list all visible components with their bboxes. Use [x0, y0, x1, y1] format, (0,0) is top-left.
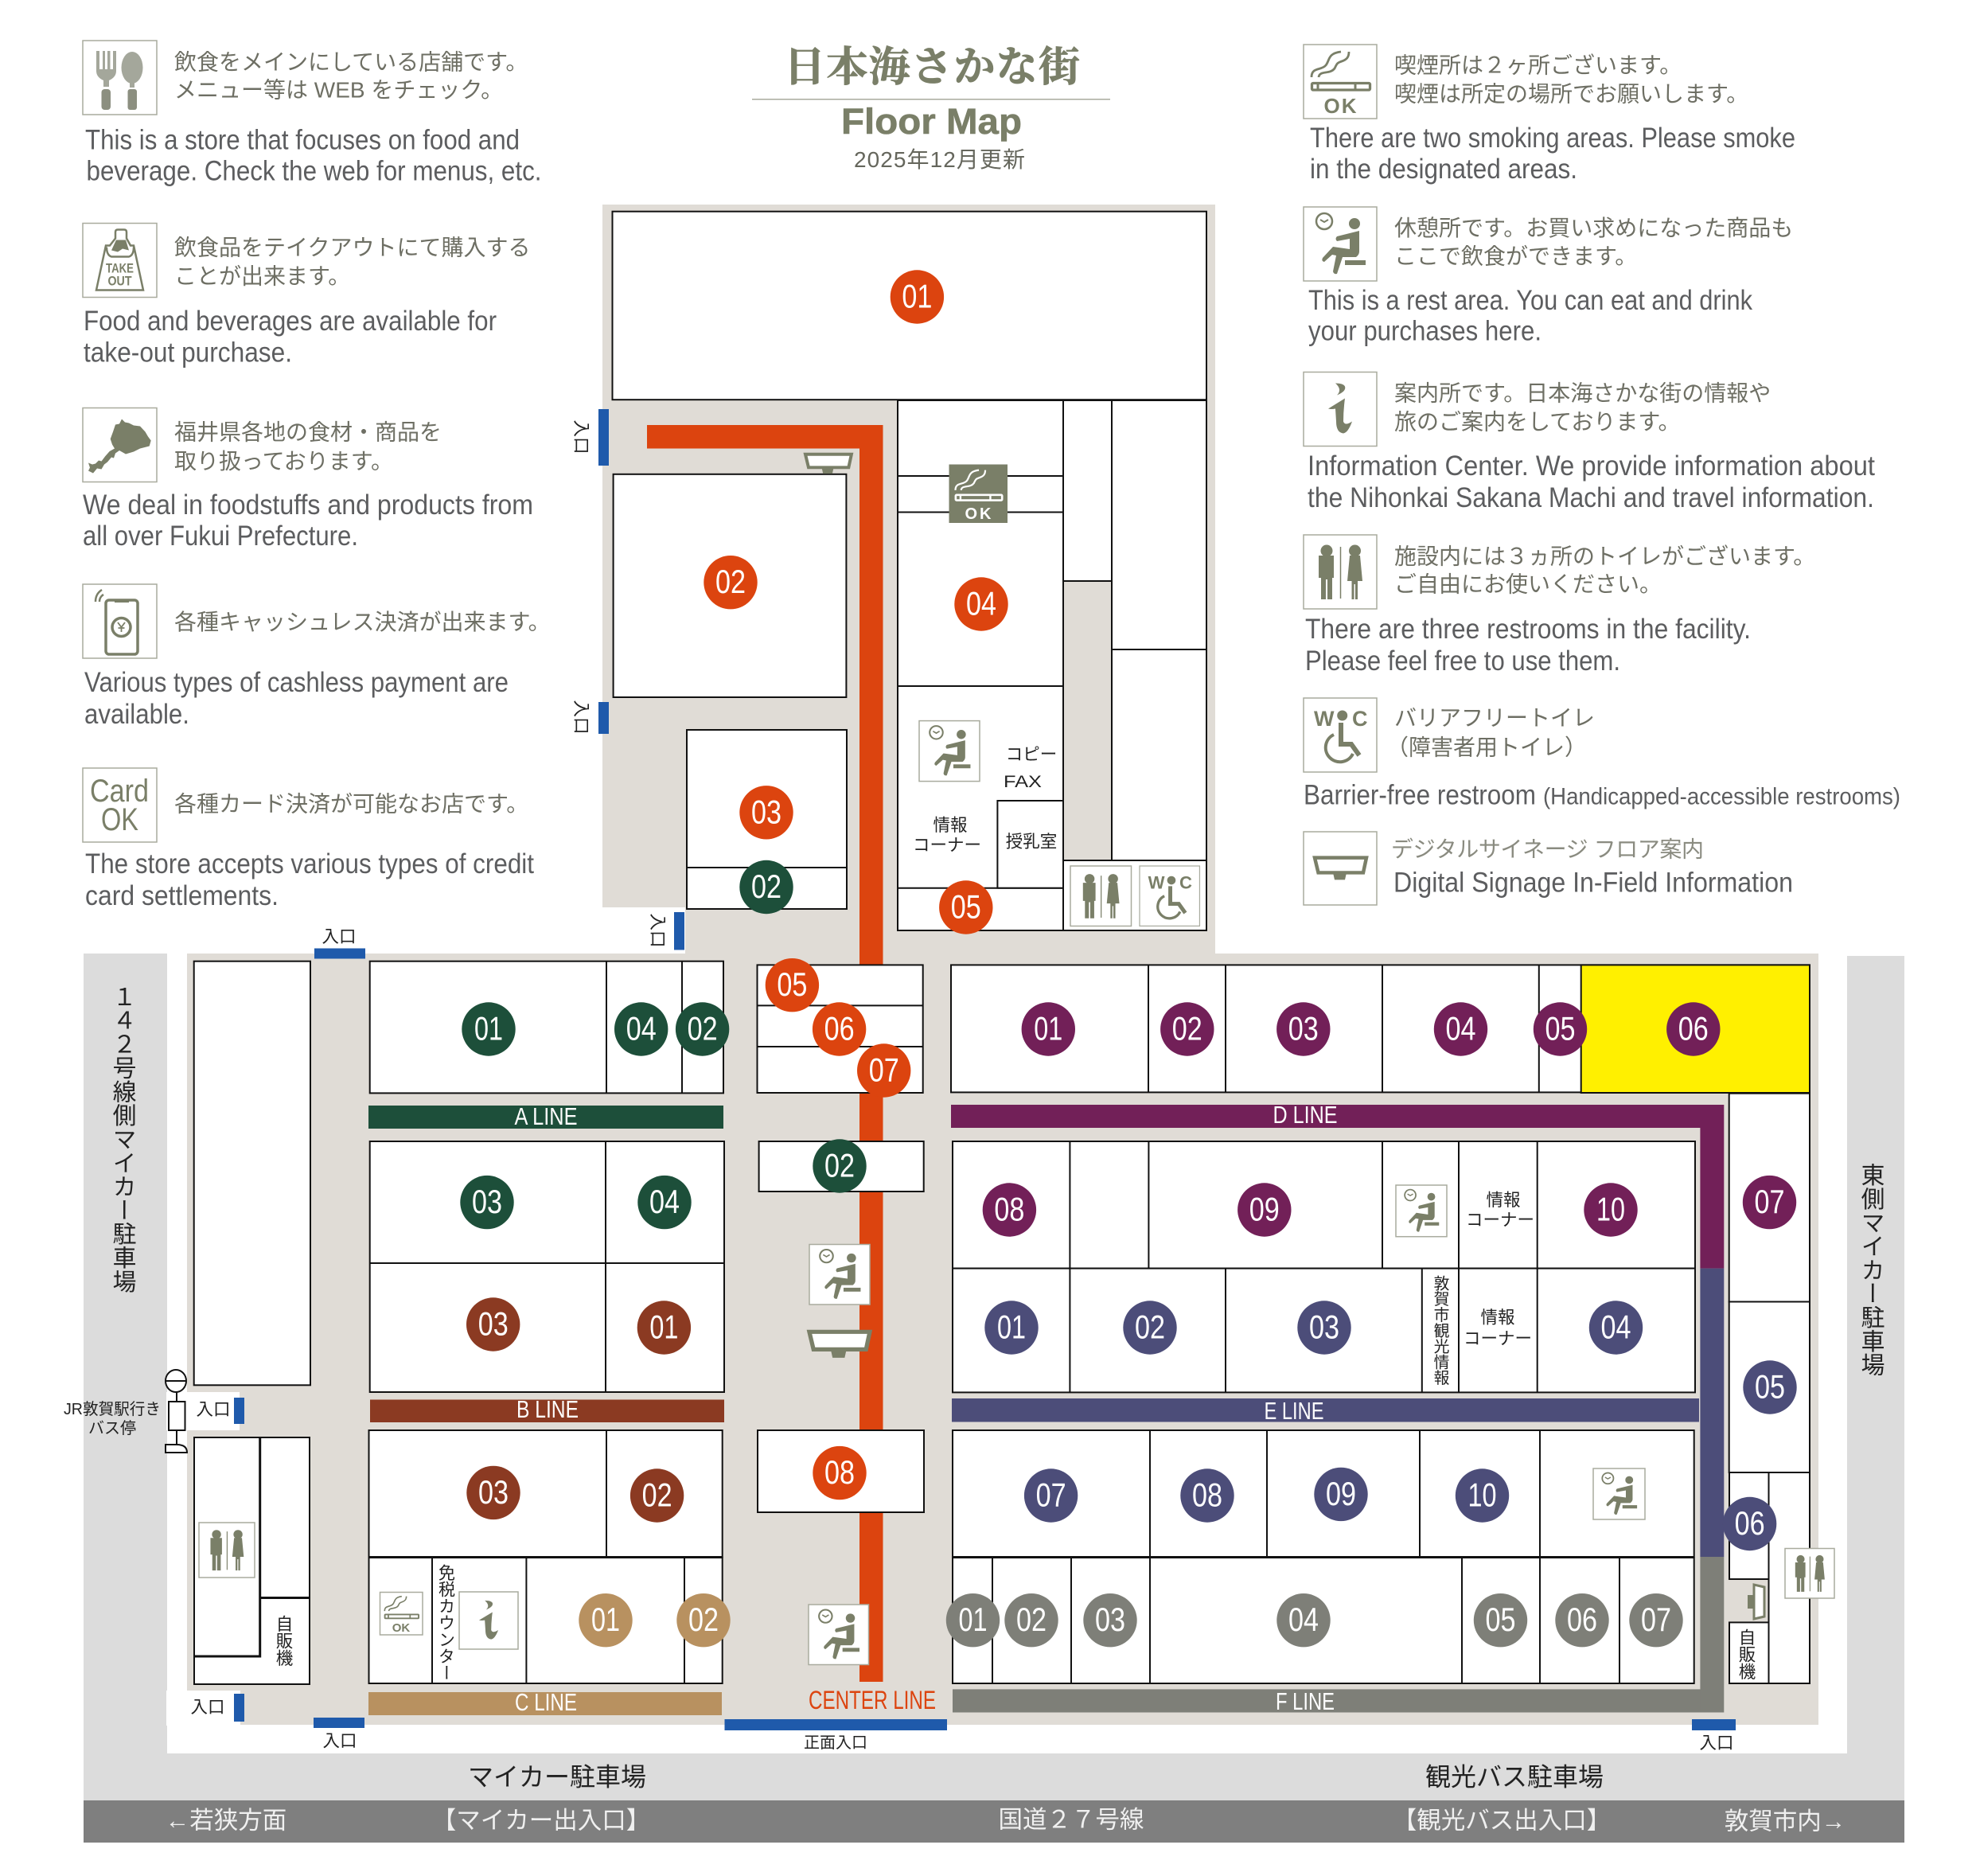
panel: center islands — [758, 965, 924, 1512]
icon: smoking OK — [1304, 45, 1377, 119]
badge: C 02: 02 — [688, 1601, 719, 1638]
panel: C line shop block — [369, 1430, 723, 1683]
badge: center 04: 04 — [966, 584, 996, 622]
badge: E 08: 08 — [1192, 1476, 1222, 1514]
label: vending machine west: 自販機 — [274, 1615, 293, 1667]
badge: E 05 — [1743, 1360, 1797, 1414]
title: Floor Map: Floor Map — [841, 101, 1022, 142]
badge: D 10: 10 — [1596, 1191, 1625, 1227]
icon: restroom — [1304, 535, 1377, 609]
icon: Card OK: Card — [90, 774, 149, 809]
entrance: west lower — [190, 1694, 244, 1722]
national route 27 road: 【観光バス出入口】 — [1393, 1807, 1611, 1834]
badge: E 04 — [1589, 1301, 1643, 1355]
legend item: barrier-free restroom — [1304, 698, 1900, 810]
line bar: E LINE — [952, 1269, 1724, 1557]
badge: F 01: 01 — [958, 1601, 987, 1638]
text: smoking — [1310, 53, 1795, 185]
badge: E 10 — [1456, 1468, 1509, 1523]
text: take out: Food and beverages are available for — [84, 306, 497, 337]
icon: digital signage center — [809, 1332, 870, 1358]
label: info corner E: コーナー — [1464, 1329, 1532, 1348]
badge: E 07 — [1024, 1468, 1078, 1523]
entrance: west upper — [196, 1398, 244, 1424]
icon: information C block — [459, 1592, 518, 1649]
icon: Card OK — [83, 768, 157, 842]
text: Fukui products: 福井県各地の食材・商品を — [174, 420, 442, 444]
badge: center 08: 08 — [824, 1453, 855, 1491]
label: copy fax — [1004, 745, 1057, 791]
legend item: take out — [83, 223, 530, 368]
label: info corner D: コーナー — [1466, 1211, 1534, 1230]
badge: B 01: 01 — [649, 1309, 678, 1345]
left parking strip: １４２号線側マイカー駐車場 — [108, 985, 136, 1293]
bottom parking strip — [84, 1753, 1904, 1801]
national route 27 road: 国道２７号線 — [998, 1807, 1144, 1834]
line bar: F LINE: F LINE — [1276, 1687, 1335, 1715]
entrance: south-west: 入口 — [322, 1732, 357, 1751]
icon: smartphone payment — [83, 584, 157, 658]
line bar: D LINE: D LINE — [1273, 1101, 1337, 1129]
legend item: rest area — [1304, 207, 1793, 347]
badge: A 01 — [462, 1002, 516, 1056]
label: nursing room: 授乳室 — [1006, 833, 1057, 852]
icon: wheelchair WC north: W — [1148, 873, 1165, 893]
label: copy fax: コピー — [1006, 745, 1057, 764]
text: take out: 飲食品をテイクアウトにて購入する — [174, 236, 530, 259]
badge: E 03 — [1297, 1301, 1351, 1355]
badge: D 05 — [1534, 1002, 1587, 1056]
bottom parking strip: マイカー駐車場 — [468, 1762, 646, 1791]
badge: center 02: 02 — [715, 563, 746, 600]
text: take out: take-out purchase. — [84, 337, 292, 368]
badge: B 02: 02 — [642, 1476, 672, 1514]
badge: A 02 top: 02 — [688, 1009, 718, 1047]
badge: E 05: 05 — [1755, 1367, 1785, 1406]
badge: A 03: 03 — [472, 1183, 502, 1220]
badge: D 06 — [1666, 1002, 1721, 1056]
text: restrooms: There are three restrooms in the facility. — [1305, 614, 1751, 645]
badge: B 03 upper — [466, 1297, 520, 1351]
badge: E 01: 01 — [997, 1309, 1026, 1345]
badge: E 09 — [1314, 1468, 1368, 1521]
badge: D 06: 06 — [1678, 1009, 1709, 1047]
icon: rest area D block — [1396, 1185, 1447, 1237]
entrance marker 2: 入口 — [571, 700, 590, 735]
badge: F 06: 06 — [1567, 1601, 1597, 1638]
label: bus stop — [64, 1400, 161, 1437]
icon: wheelchair WC: W — [1314, 707, 1335, 731]
legend item: smoking — [1304, 45, 1795, 185]
icon: wheelchair WC: C — [1352, 707, 1367, 731]
line bar: E LINE: E LINE — [1264, 1397, 1324, 1425]
panel: north wing shops — [613, 212, 1206, 930]
badge: E 06: 06 — [1735, 1504, 1765, 1542]
badge: center 07 — [857, 1043, 910, 1098]
label: copy fax: FAX — [1004, 772, 1042, 791]
entrance: south-west — [314, 1718, 364, 1751]
badge: A 03 — [460, 1176, 514, 1229]
left outbuilding icons — [199, 1523, 293, 1667]
badge: E 10: 10 — [1467, 1476, 1496, 1514]
entrance marker 3: 入口 — [648, 913, 667, 948]
badge: D 05: 05 — [1545, 1009, 1576, 1047]
center line corridor — [647, 425, 883, 1682]
badge: F 07 — [1629, 1593, 1683, 1647]
icon: digital signage east — [1748, 1585, 1764, 1619]
badge: C 01: 01 — [591, 1601, 620, 1638]
badge: F 03 — [1083, 1593, 1137, 1647]
icon: smoking OK: OK — [1324, 94, 1357, 118]
badge: center 06: 06 — [824, 1009, 855, 1047]
bus stop — [64, 1370, 187, 1453]
panel: E and F lower block — [953, 1430, 1694, 1683]
text: smoking: 喫煙所は２ヶ所ございます。 — [1394, 53, 1682, 78]
D and E block labels — [1396, 1185, 1534, 1386]
label: CENTER LINE: CENTER LINE — [809, 1686, 936, 1714]
text: rest area: 休憩所です。お買い求めになった商品も — [1394, 216, 1793, 240]
text: Fukui products: all over Fukui Prefecture. — [83, 521, 358, 552]
text: card OK — [85, 791, 534, 911]
text: Fukui products — [83, 420, 533, 552]
text: barrier-free restroom: (Handicapped-accessible restrooms) — [1543, 783, 1900, 810]
center island icons — [809, 1245, 936, 1714]
badge: D 08: 08 — [994, 1191, 1024, 1227]
badges: D line — [983, 1002, 1796, 1237]
label: info corner D: 情報 — [1486, 1191, 1521, 1210]
entrances main building — [190, 927, 1736, 1753]
icon: restroom north — [1070, 866, 1132, 926]
badge: E 04: 04 — [1601, 1309, 1631, 1345]
text: information center: the Nihonkai Sakana Machi and travel information. — [1308, 482, 1874, 513]
text: cashless payment: available. — [84, 699, 189, 730]
icon: Fukui prefecture map — [83, 408, 157, 482]
entrances north wing — [571, 409, 684, 950]
entrance: north-west: 入口 — [322, 927, 357, 946]
badge: A 04: 04 — [649, 1183, 680, 1220]
line bar: A LINE: A LINE — [514, 1102, 578, 1130]
line bar: F LINE — [953, 1557, 1724, 1715]
text: rest area — [1308, 216, 1793, 347]
text: rest area: This is a rest area. You can eat and drink — [1308, 285, 1752, 316]
text: information center — [1308, 380, 1875, 513]
badge: E 08 — [1180, 1468, 1234, 1523]
badge: A 01: 01 — [474, 1009, 503, 1047]
badge: E 02: 02 — [1135, 1309, 1165, 1345]
entrance marker 3 — [648, 912, 684, 950]
left outbuildings — [194, 961, 310, 1684]
icon: smoking area dark — [949, 465, 1008, 523]
icon: information — [1304, 372, 1377, 446]
badge: C 02 — [676, 1593, 731, 1647]
parking lots and road — [84, 954, 1904, 1843]
text: restrooms: Please feel free to use them. — [1305, 645, 1620, 677]
label: info corner E — [1464, 1309, 1532, 1348]
badges: B line — [466, 1297, 691, 1523]
text: smoking: There are two smoking areas. Please smoke — [1310, 123, 1795, 154]
badge: F 04: 04 — [1288, 1601, 1319, 1638]
icon: rest area — [1304, 207, 1377, 281]
badge: D 01 — [1022, 1002, 1075, 1056]
badge: F 07: 07 — [1641, 1601, 1671, 1638]
badge: E 07: 07 — [1036, 1476, 1066, 1514]
legend item: restrooms — [1304, 535, 1815, 677]
legend: right column — [1304, 45, 1900, 905]
icon: smoking area dark: OK — [965, 505, 992, 523]
icon: wheelchair WC north — [1140, 866, 1199, 926]
entrance marker 1: 入口 — [571, 419, 590, 454]
line bar: B LINE — [370, 1395, 724, 1423]
text: card OK: card settlements. — [85, 880, 279, 911]
badges: A line — [460, 1002, 729, 1229]
text: cashless payment — [84, 610, 551, 730]
icon: wheelchair WC — [1304, 698, 1377, 772]
text: cashless payment: Various types of cashless payment are — [84, 667, 509, 698]
badge: center 04 — [954, 577, 1008, 631]
text: card OK: 各種カード決済が可能なお店です。 — [174, 791, 528, 817]
icon: digital signage north — [805, 454, 852, 474]
north wing labels and icons — [805, 454, 1199, 926]
icon: wheelchair WC north: C — [1179, 873, 1192, 893]
text: smoking: in the designated areas. — [1310, 154, 1577, 185]
badge: F 02 — [1004, 1593, 1058, 1647]
badge: D 09 — [1238, 1183, 1292, 1237]
icon: rest area E block — [1593, 1468, 1645, 1519]
badge: B 03 lower: 03 — [478, 1473, 509, 1511]
entrance: south-east: 入口 — [1699, 1734, 1734, 1753]
update date: 2025年12月更新 — [854, 147, 1025, 172]
text: barrier-free restroom: （障害者用トイレ） — [1386, 735, 1587, 759]
icon: restroom west — [199, 1523, 255, 1578]
text: barrier-free restroom: バリアフリートイレ — [1394, 705, 1595, 731]
badge: center 03 — [739, 786, 793, 839]
entrance: main — [724, 1719, 947, 1752]
icon: rest area north — [919, 721, 980, 782]
text: information center: Information Center. We provide information about — [1308, 450, 1875, 482]
badge: C 01 — [579, 1593, 633, 1647]
text: food and drink: 飲食をメインにしている店舗です。 — [174, 49, 528, 75]
badge: A 04 top — [614, 1002, 668, 1056]
badge: center 05 — [766, 958, 819, 1012]
icon: fork and spoon — [83, 41, 157, 115]
badge: center 06 — [813, 1002, 866, 1056]
badge: D 10 — [1584, 1183, 1638, 1237]
badge: D 08 — [983, 1183, 1036, 1237]
icon: Card OK: OK — [101, 802, 138, 837]
badge: F 03: 03 — [1095, 1601, 1125, 1638]
badge: A 02 north: 02 — [751, 868, 781, 905]
text: food and drink: beverage. Check the web for menus, etc. — [86, 156, 541, 186]
right parking strip — [1847, 956, 1904, 1760]
entrance: main: 正面入口 — [804, 1734, 867, 1752]
badge: D 02 — [1160, 1002, 1214, 1056]
entrance marker 2 — [571, 700, 609, 735]
text: digital signage: デジタルサイネージ フロア案内 — [1391, 837, 1704, 861]
legend item: Fukui products — [83, 408, 533, 552]
text: information center: 旅のご案内をしております。 — [1394, 409, 1681, 435]
text: food and drink: This is a store that focuses on food and — [85, 124, 520, 156]
badge: D 07: 07 — [1754, 1183, 1784, 1220]
text: restrooms: ご自由にお使いください。 — [1394, 571, 1662, 597]
badge: F 04 — [1276, 1593, 1331, 1647]
badges: C line — [579, 1593, 731, 1647]
text: food and drink: メニュー等は WEB をチェック。 — [174, 78, 503, 102]
badge: E 02 — [1123, 1301, 1177, 1355]
badge: B 02 — [630, 1468, 684, 1523]
title: Japanese: 日本海さかな街 — [784, 45, 1080, 91]
text: card OK: The store accepts various types of credit — [85, 848, 534, 879]
icons in C block — [380, 1564, 518, 1681]
national route 27 road: 【マイカー出入口】 — [432, 1807, 650, 1834]
legend: left column — [83, 41, 551, 911]
entrance marker 1 — [571, 409, 609, 466]
text: information center: 案内所です。日本海さかな街の情報や — [1394, 380, 1771, 406]
national route 27 road: ←若狭方面 — [166, 1807, 286, 1834]
legend item: cashless payment — [83, 584, 551, 730]
badge: A 02 center island — [813, 1139, 867, 1193]
badge: center 03: 03 — [751, 793, 781, 830]
badge: E 03: 03 — [1309, 1309, 1339, 1345]
badge: D 02: 02 — [1172, 1009, 1202, 1047]
bottom parking strip: 観光バス駐車場 — [1425, 1762, 1604, 1791]
bus stop sign pole — [166, 1370, 187, 1453]
badge: center 02 — [704, 556, 758, 609]
title block — [752, 45, 1110, 172]
legend item: digital signage — [1304, 832, 1793, 905]
text: Fukui products: We deal in foodstuffs and products from — [83, 489, 533, 521]
badge: A 04 — [637, 1176, 692, 1229]
badges: E line — [984, 1301, 1797, 1550]
panel: D line top row — [951, 965, 1810, 1093]
building floor background — [166, 205, 1818, 1726]
badge: B 03 upper: 03 — [478, 1305, 509, 1342]
icon: take out bag: OUT — [108, 274, 132, 288]
badge: D 04 — [1434, 1002, 1487, 1056]
badge: F 01 — [946, 1593, 1000, 1647]
line bar: C LINE: C LINE — [515, 1688, 577, 1716]
badge: E 06 — [1723, 1497, 1776, 1550]
badge: A 04 top: 04 — [626, 1009, 657, 1047]
text: restrooms — [1305, 544, 1815, 677]
badges: center line lower — [766, 958, 910, 1500]
text: digital signage — [1391, 837, 1793, 898]
badge: center 05 north: 05 — [951, 888, 981, 925]
legend item: food and drink — [83, 41, 541, 186]
label: duty-free counter: 免税カウンター — [436, 1564, 455, 1681]
badge: F 05 — [1474, 1593, 1527, 1647]
line bar: D LINE — [951, 1101, 1724, 1269]
text: barrier-free restroom — [1304, 705, 1900, 810]
entrance: south-east — [1692, 1719, 1736, 1753]
badge: E 09: 09 — [1326, 1475, 1356, 1512]
badge: D 01: 01 — [1034, 1009, 1062, 1047]
text: smoking: 喫煙は所定の場所でお願いします。 — [1394, 81, 1748, 107]
badge: E 01 — [984, 1301, 1039, 1355]
text: barrier-free restroom: Barrier-free restroom — [1304, 780, 1536, 810]
text: Fukui products: 取り扱っております。 — [174, 449, 393, 474]
text: rest area: your purchases here. — [1308, 315, 1542, 347]
badge: center 05: 05 — [777, 965, 807, 1003]
national route 27 road: 敦賀市内→ — [1725, 1808, 1846, 1835]
badge: F 06 — [1555, 1593, 1609, 1647]
icon: take out bag: TAKE — [106, 261, 134, 275]
badge: center 07: 07 — [869, 1051, 899, 1089]
panel: D and E center block — [953, 1141, 1695, 1392]
badge: A 02 center island: 02 — [824, 1146, 855, 1184]
badge: A 02 north — [739, 860, 793, 914]
badge: D 03: 03 — [1288, 1009, 1319, 1047]
icon: smoking C block — [380, 1592, 423, 1635]
icon: rest area center — [809, 1245, 870, 1305]
entrance: north-west — [314, 927, 365, 958]
label: info corner north: コーナー — [913, 836, 981, 855]
text: take out — [84, 236, 530, 368]
line bar: A LINE — [368, 1102, 723, 1130]
label: vending machine east: 自販機 — [1736, 1628, 1756, 1680]
badge: F 05: 05 — [1485, 1601, 1515, 1638]
badges: F line — [946, 1593, 1683, 1647]
text: digital signage: Digital Signage In-Field Information — [1393, 868, 1793, 898]
badge: D 04: 04 — [1445, 1009, 1475, 1047]
label: bus stop: JR敦賀駅行き — [64, 1400, 161, 1418]
panel: east side shops — [1729, 1094, 1834, 1683]
text: rest area: ここで飲食ができます。 — [1394, 244, 1637, 269]
text: restrooms: 施設内には３ヵ所のトイレがございます。 — [1394, 544, 1815, 568]
entrance: west lower: 入口 — [190, 1698, 225, 1717]
badge: D 09: 09 — [1249, 1191, 1280, 1227]
text: cashless payment: 各種キャッシュレス決済が出来ます。 — [174, 610, 551, 634]
right parking strip: 東側マイカー駐車場 — [1857, 1163, 1885, 1377]
badge: B 01 — [637, 1301, 691, 1355]
line bar: B LINE: B LINE — [516, 1395, 579, 1423]
label: info corner E: 情報 — [1480, 1309, 1515, 1328]
label: Tsuruga tourist information: 敦賀市観光情報 — [1431, 1274, 1449, 1386]
legend item: information center — [1304, 372, 1875, 513]
badge: F 02: 02 — [1016, 1601, 1047, 1638]
icon: take out bag — [83, 223, 157, 298]
label: info corner north: 情報 — [933, 816, 968, 835]
legend item: card OK — [83, 768, 534, 911]
badge: D 03 — [1276, 1002, 1331, 1056]
text: food and drink — [85, 49, 541, 186]
icon: restroom east — [1785, 1549, 1834, 1598]
badge: B 03 lower — [466, 1466, 520, 1519]
badge: A 02 top — [676, 1002, 729, 1056]
left parking strip — [84, 954, 167, 1757]
entrance: west upper: 入口 — [196, 1400, 231, 1419]
label: info corner D — [1466, 1191, 1534, 1230]
badge: center 01 — [891, 270, 944, 324]
badge: D 07 — [1743, 1176, 1796, 1229]
panel: A and B line shop blocks — [370, 961, 724, 1392]
line bar: C LINE — [368, 1688, 722, 1716]
badge: center 05 north — [939, 880, 993, 934]
icon: smoking C block: OK — [392, 1621, 410, 1635]
badge: center 08 — [813, 1446, 867, 1500]
badge: center 01: 01 — [902, 277, 932, 315]
label: info corner north — [913, 816, 981, 855]
national route 27 road — [84, 1800, 1904, 1843]
icon: digital signage — [1304, 832, 1377, 905]
text: take out: ことが出来ます。 — [174, 264, 350, 288]
icon: rest area south — [809, 1605, 869, 1665]
label: bus stop: バス停 — [88, 1419, 136, 1437]
badges: north wing center line — [704, 270, 1008, 934]
